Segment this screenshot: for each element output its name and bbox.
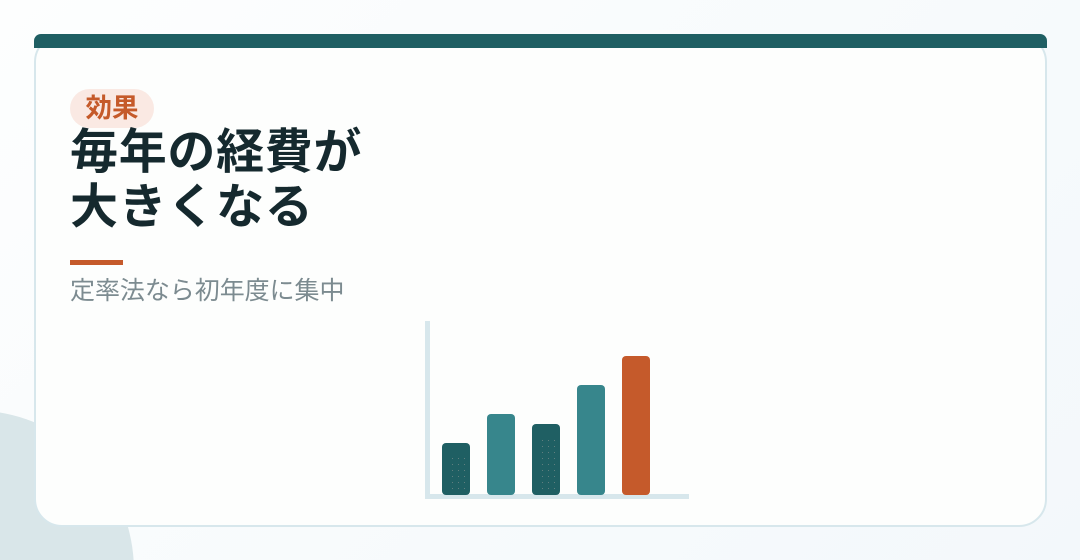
title: 大きくなる <box>70 181 314 234</box>
bar 3 <box>532 424 560 495</box>
bar 2 <box>487 414 515 495</box>
decorative circle <box>0 412 134 560</box>
chart axes <box>425 321 689 499</box>
subtitle: 定率法なら初年度に集中 <box>70 277 344 305</box>
title <box>70 126 362 234</box>
bar 1 <box>442 443 470 495</box>
badge <box>70 89 154 128</box>
card top bar <box>34 34 1047 48</box>
accent rule <box>70 260 123 265</box>
bar 5 highlighted <box>622 356 650 495</box>
title: 毎年の経費が <box>70 126 362 179</box>
bar 4 <box>577 385 605 495</box>
badge: 効果 <box>86 93 138 123</box>
